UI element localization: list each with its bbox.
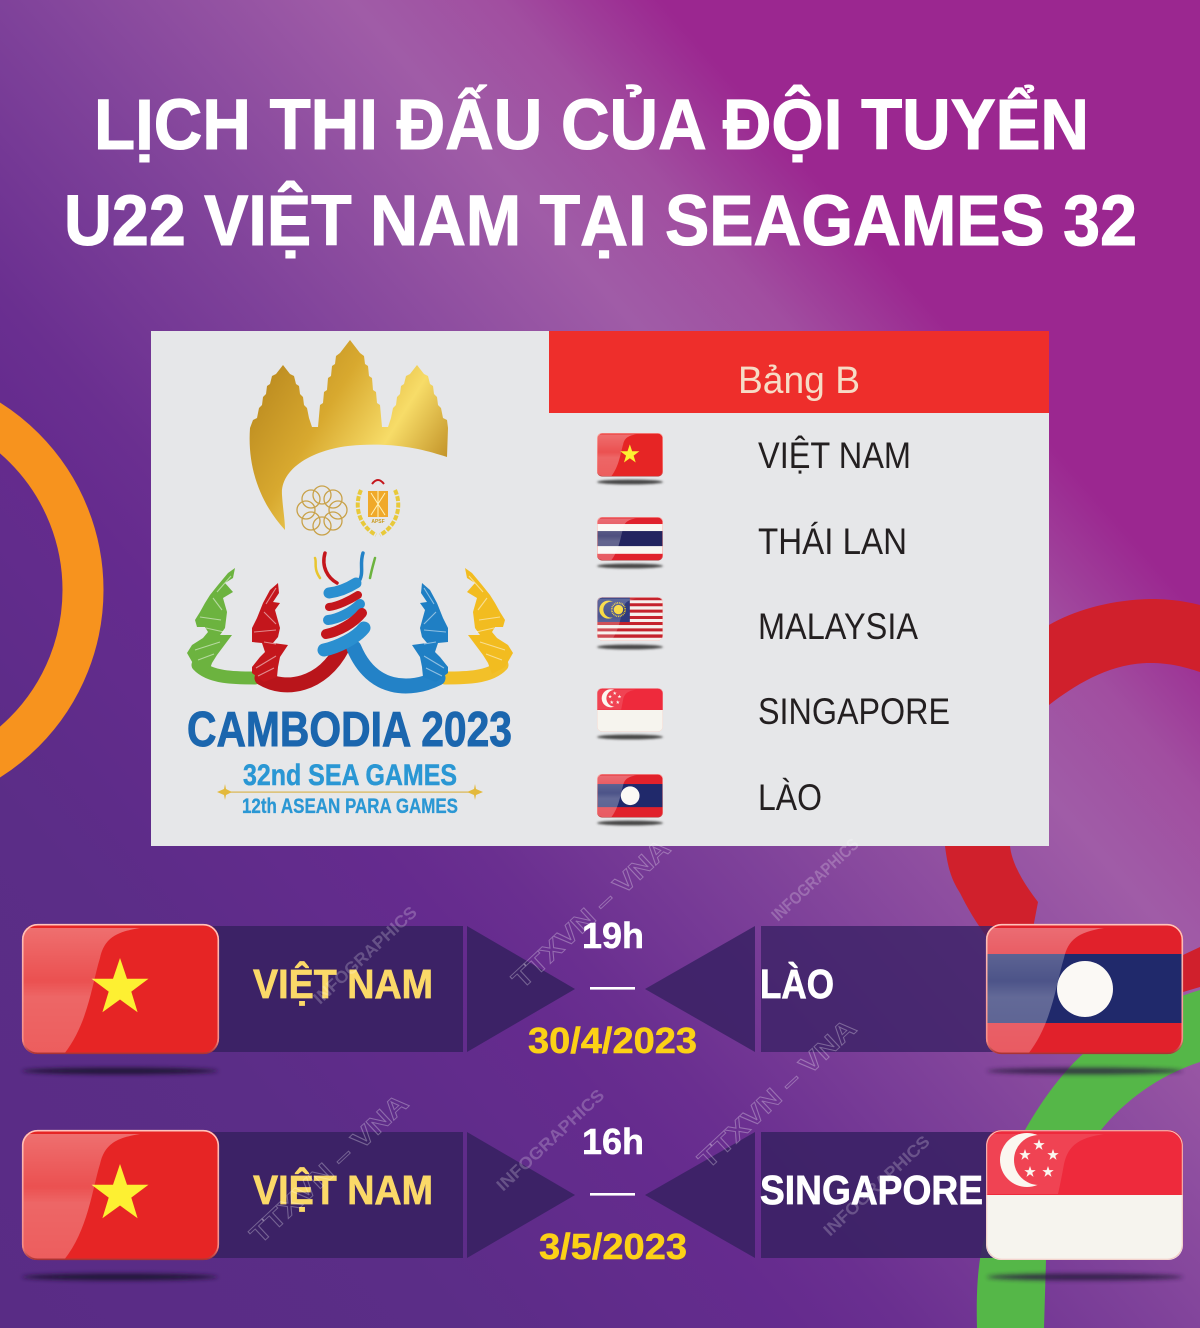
watermarks: TTXVN – VNA <box>692 1012 862 1174</box>
shadow right <box>987 1274 1183 1280</box>
watermarks: TTXVN – VNA <box>506 832 676 994</box>
naga heads <box>187 568 513 682</box>
team row: Singapore <box>597 688 950 739</box>
left arrow <box>467 1132 575 1258</box>
twisted knot <box>315 553 375 650</box>
team row: Lào: LÀO <box>758 777 822 818</box>
icon: naga knot <box>187 553 513 686</box>
watermarks: INFOGRAPHICS <box>493 1086 608 1195</box>
title: LỊCH THI ĐẤU CỦA ĐỘI TUYỂN <box>94 85 1089 165</box>
logo text <box>187 703 512 818</box>
left team bar <box>200 926 463 1052</box>
header: Bảng B: Bảng B <box>738 360 860 402</box>
match 2: Việt Nam vs Singapore <box>22 1121 1183 1280</box>
watermarks: INFOGRAPHICS <box>310 903 421 1008</box>
right team bar <box>761 926 1000 1052</box>
logo text: CAMBODIA 2023 <box>187 703 512 757</box>
title <box>64 85 1137 261</box>
logo text: 12th ASEAN PARA GAMES <box>242 795 458 818</box>
match 1: Việt Nam vs Lào <box>22 915 1183 1074</box>
right arrow <box>645 1132 755 1258</box>
logo: Cambodia 2023 SEA Games <box>187 340 513 818</box>
shadow left <box>22 1274 218 1280</box>
kick-off time: 19h <box>582 915 644 956</box>
watermarks: TTXVN – VNA <box>244 1087 414 1249</box>
naga bodies <box>198 648 502 686</box>
dash <box>590 1193 635 1196</box>
flag: Việt Nam <box>22 924 219 1054</box>
team row: Thái Lan <box>597 517 907 568</box>
flag: Việt Nam <box>22 1130 219 1260</box>
decorative ring: green <box>977 990 1200 1328</box>
team: Việt Nam: VIỆT NAM <box>253 961 433 1007</box>
logo divider <box>217 784 483 800</box>
icon: golden crown <box>250 340 448 530</box>
right arrow <box>645 926 755 1052</box>
date: 30/4/2023 <box>528 1020 697 1061</box>
team: Lào: LÀO <box>760 961 834 1007</box>
watermarks: INFOGRAPHICS <box>820 1132 934 1240</box>
title: U22 VIỆT NAM TẠI SEAGAMES 32 <box>64 181 1137 261</box>
team row: Malaysia <box>597 597 918 649</box>
decorative ring: red <box>945 599 1200 1000</box>
icon: APSF emblem: APSF <box>371 519 385 525</box>
panel: group B <box>151 331 1049 846</box>
team row: Malaysia: MALAYSIA <box>758 606 918 647</box>
team row: Thái Lan: THÁI LAN <box>758 521 907 562</box>
watermarks <box>244 832 934 1249</box>
icon: APSF emblem <box>358 480 398 535</box>
team row: Singapore: SINGAPORE <box>758 691 950 732</box>
team: Singapore: SINGAPORE <box>760 1167 983 1213</box>
flag: Lào <box>986 924 1183 1054</box>
team row: Việt Nam: VIỆT NAM <box>758 435 911 476</box>
watermarks: INFOGRAPHICS <box>768 835 863 925</box>
team row: Việt Nam <box>597 433 911 484</box>
team row: Lào <box>597 774 822 825</box>
flag: Singapore <box>986 1130 1183 1260</box>
left arrow <box>467 926 575 1052</box>
date: 3/5/2023 <box>539 1226 687 1267</box>
shadow right <box>987 1068 1183 1074</box>
right team bar <box>761 1132 1000 1258</box>
logo text: 32nd SEA GAMES <box>243 759 457 792</box>
decorative ring: orange <box>0 389 83 791</box>
kick-off time: 16h <box>582 1121 644 1162</box>
icon: SEAGF flower emblem <box>297 486 347 535</box>
left team bar <box>200 1132 463 1258</box>
header: Bảng B <box>549 331 1049 413</box>
dash <box>590 987 635 990</box>
team: Việt Nam: VIỆT NAM <box>253 1167 433 1213</box>
shadow left <box>22 1068 218 1074</box>
